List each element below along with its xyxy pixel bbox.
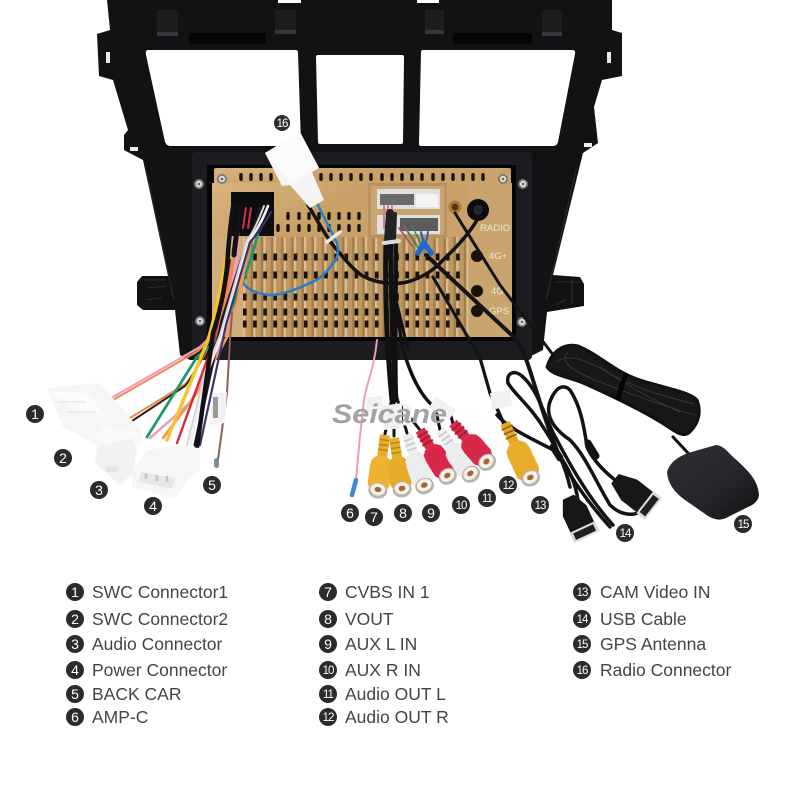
callout badges on photo: 8 [399, 505, 407, 521]
callout badges on photo: 4 [149, 498, 157, 514]
legend column 3: 13 [577, 587, 588, 599]
connector 1 SWC [47, 383, 143, 450]
right window [419, 50, 575, 146]
gold head unit chassis: 4G+ [489, 251, 508, 262]
rca 7 yellow [366, 434, 396, 500]
legend column 1: SWC Connector1 [92, 582, 228, 602]
legend column 2: CVBS IN 1 [345, 582, 430, 602]
legend column 1 [66, 582, 228, 727]
gold head unit chassis: RADIO [480, 223, 510, 234]
legend column 2: AUX L IN [345, 634, 417, 654]
rca bundle wires [385, 393, 504, 436]
internal wires on chassis [243, 203, 557, 450]
rca 11 white [431, 424, 485, 487]
wire harness bundle [113, 206, 271, 467]
legend column 2 [319, 582, 449, 727]
legend column 2: 11 [323, 689, 334, 701]
legend column 2: Audio OUT R [345, 707, 449, 727]
legend column 1: 6 [71, 709, 79, 725]
legend column 3: Radio Connector [600, 660, 731, 680]
gold head unit chassis [194, 168, 528, 337]
callout badges on photo: 1 [31, 406, 39, 422]
legend column 2: Audio OUT L [345, 684, 446, 704]
legend column 2: 8 [324, 611, 332, 627]
connector ports [231, 189, 489, 236]
rca 9 white [397, 431, 438, 497]
back car wire tag and tip [210, 392, 227, 468]
usb cables [497, 373, 640, 527]
watermark: Seicane [332, 399, 447, 429]
legend column 3: CAM Video IN [600, 582, 711, 602]
legend column 1: BACK CAR [92, 684, 181, 704]
callout badges on photo: 7 [370, 509, 378, 525]
rca tags [365, 390, 512, 430]
device frame [97, 0, 622, 360]
legend column 2: 10 [323, 665, 334, 677]
legend column 1: SWC Connector2 [92, 609, 228, 629]
legend column 1: Power Connector [92, 660, 227, 680]
usb plug 2 [606, 468, 662, 520]
callout badges on photo: 15 [738, 519, 749, 531]
legend column 2: VOUT [345, 609, 394, 629]
legend column 3 [573, 582, 731, 680]
legend column 3: 14 [577, 614, 589, 626]
gold head unit chassis: 4G [491, 286, 504, 297]
legend column 2: AUX R IN [345, 660, 421, 680]
rca 10 red [411, 424, 461, 489]
legend column 3: GPS Antenna [600, 634, 706, 654]
callout badges on photo [26, 115, 752, 542]
legend column 1: 5 [71, 686, 79, 702]
gps cable coil [547, 345, 699, 453]
connector 3 audio [95, 438, 137, 485]
connector 4 power [132, 446, 200, 498]
callout badges on photo: 6 [346, 505, 354, 521]
amp-c wire [352, 340, 377, 495]
callout badges on photo: 11 [482, 493, 493, 505]
callout badges on photo: 14 [620, 528, 632, 540]
callout badges on photo: 3 [95, 482, 103, 498]
legend column 1: 4 [71, 662, 79, 678]
legend column 2: 9 [324, 636, 332, 652]
callout badges on photo: 16 [277, 118, 288, 130]
gold head unit chassis: GPS [489, 306, 509, 317]
legend column 1: 3 [71, 636, 79, 652]
legend column 1: 1 [71, 584, 79, 600]
callout badges on photo: 9 [427, 505, 435, 521]
callout badges on photo: 13 [535, 500, 546, 512]
legend column 2: 12 [323, 712, 334, 724]
callout badges on photo: 10 [456, 500, 467, 512]
center window [316, 55, 404, 144]
rca 12 red [445, 416, 501, 475]
rca 8 yellow [383, 436, 414, 499]
legend column 1: 2 [71, 611, 79, 627]
legend column 1: AMP-C [92, 707, 148, 727]
legend column 1: Audio Connector [92, 634, 223, 654]
rca 13 yellow [494, 418, 545, 491]
legend column 3: USB Cable [600, 609, 687, 629]
callout badges on photo: 2 [59, 450, 67, 466]
connector 2 SWC [96, 425, 143, 453]
legend column 3: 16 [577, 665, 588, 677]
legend column 2: 7 [324, 584, 332, 600]
legend column 3: 15 [577, 639, 588, 651]
callout badges on photo: 12 [503, 480, 514, 492]
usb plug 1 [556, 491, 600, 543]
callout badges on photo: 5 [208, 477, 216, 493]
gps antenna [667, 445, 759, 520]
left window [146, 50, 301, 146]
radio connector white plug [265, 132, 324, 208]
